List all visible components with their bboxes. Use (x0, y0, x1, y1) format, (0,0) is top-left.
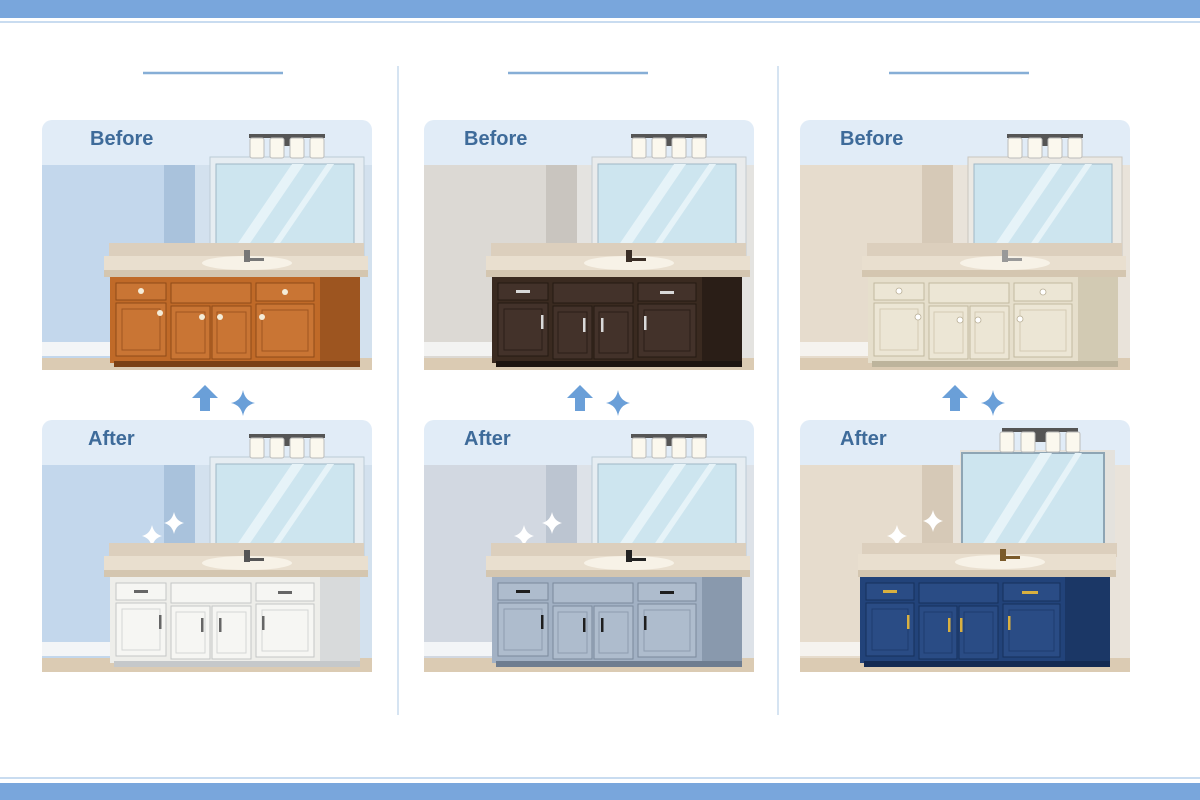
icon: sparkles (514, 512, 562, 547)
icon: light fixture (249, 434, 325, 458)
arrow: column 3 (942, 385, 1005, 416)
icon: light fixture (1007, 134, 1083, 158)
heading: After: After (464, 428, 511, 450)
icon: light fixture (1000, 428, 1080, 452)
heading: After: After (840, 428, 887, 450)
bottom band (0, 783, 1200, 800)
panel: column 3 after (navy) (800, 420, 1130, 672)
panel: column 1 before (oak) (42, 120, 372, 370)
panel: column 2 before (espresso) (424, 120, 754, 370)
panel: column 2 after (gray-blue) (424, 420, 754, 672)
heading: Before: Before (840, 128, 903, 150)
icon: sparkles (887, 510, 943, 547)
icon: sparkles (142, 512, 184, 547)
heading: Before: Before (464, 128, 527, 150)
icon: light fixture (631, 134, 707, 158)
panel: column 1 after (white) (42, 420, 372, 672)
icon: light fixture (249, 134, 325, 158)
arrow: column 2 (567, 385, 630, 416)
dividers (398, 66, 778, 715)
panel: column 3 before (cream) (800, 120, 1130, 370)
heading: After: After (88, 428, 135, 450)
heading: Before: Before (90, 128, 153, 150)
column title lines (143, 72, 1029, 74)
arrow: column 1 (192, 385, 255, 416)
top band (0, 0, 1200, 18)
icon: light fixture (631, 434, 707, 458)
